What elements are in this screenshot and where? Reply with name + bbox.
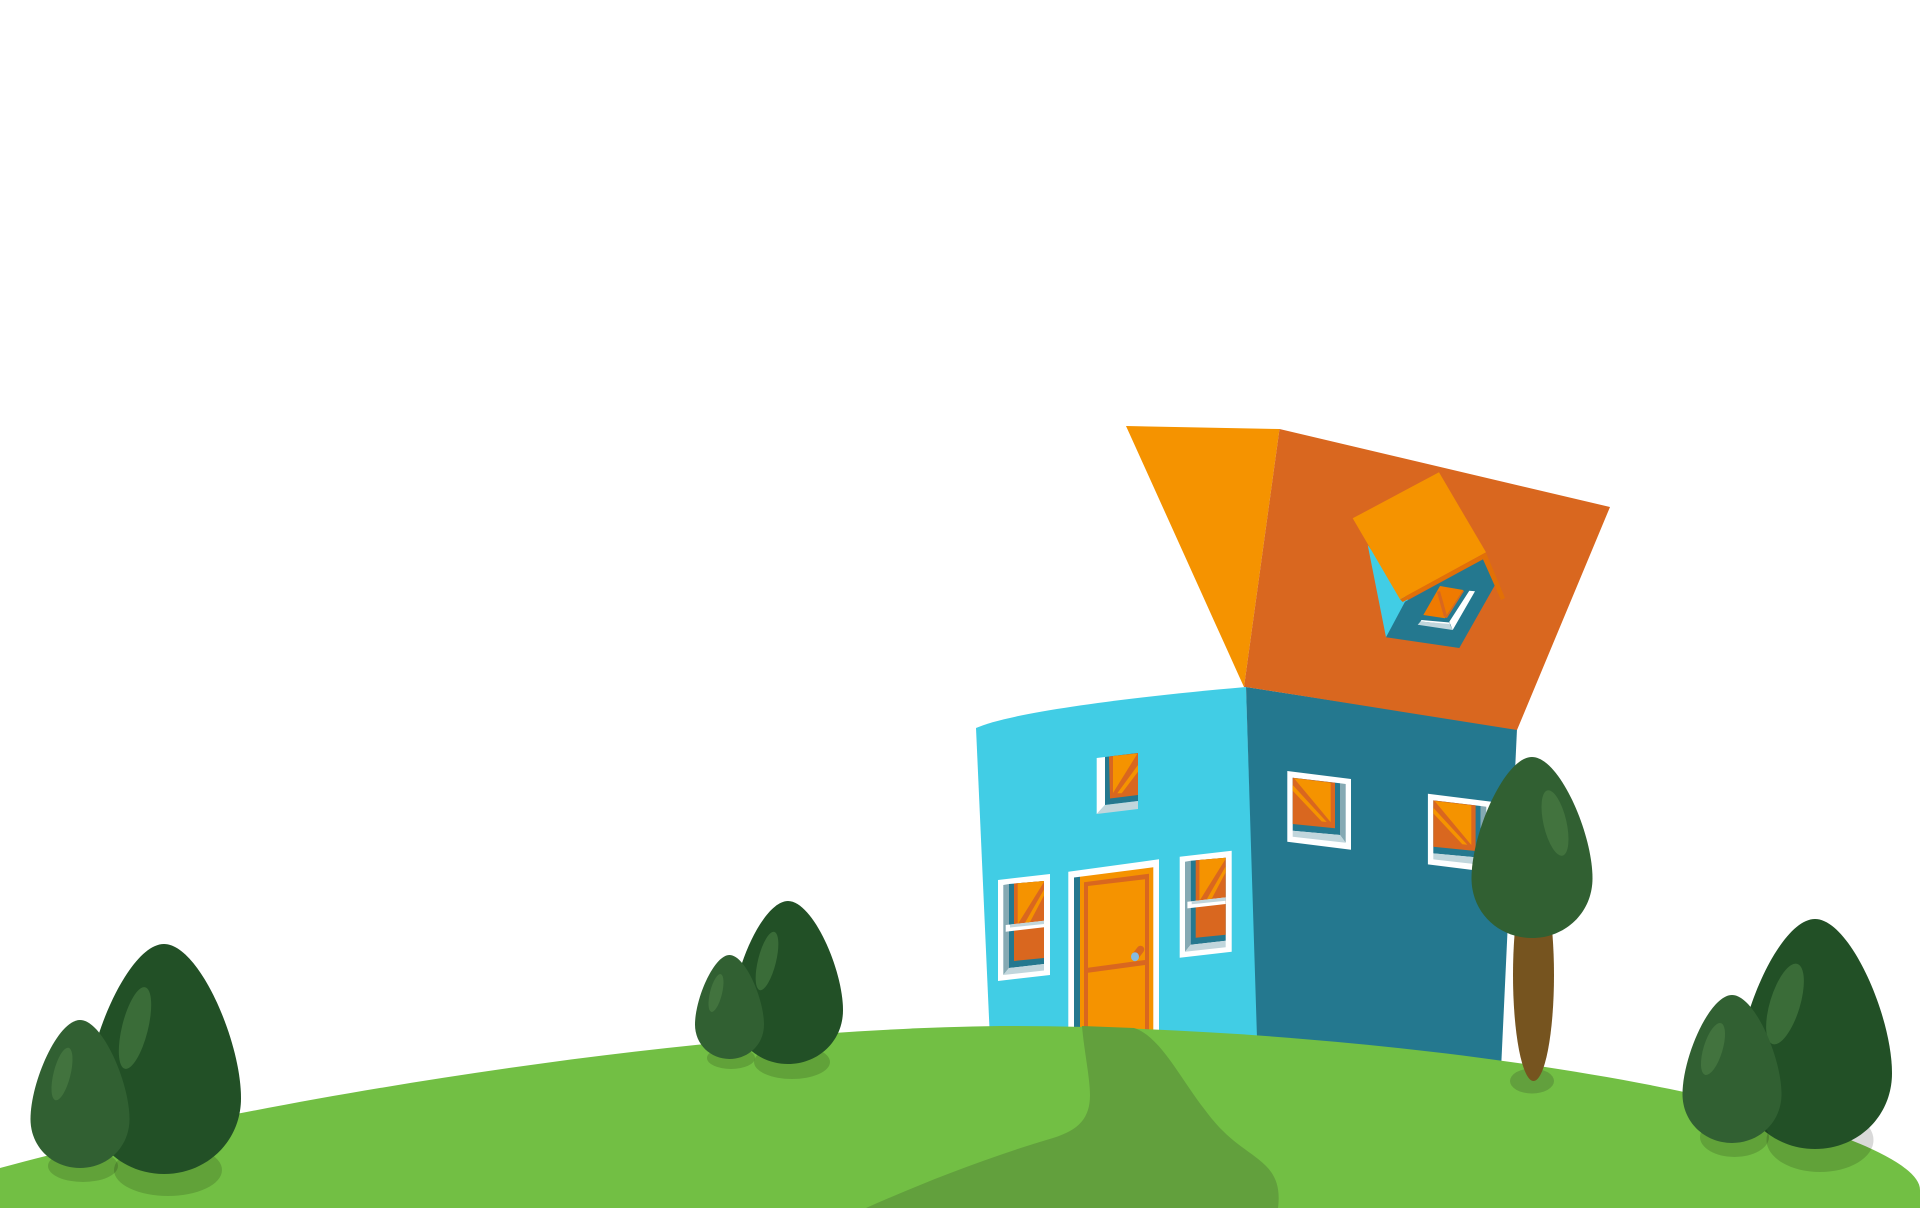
window: right of door [1180, 851, 1232, 958]
door [1068, 859, 1159, 1040]
dormer side [1368, 545, 1408, 637]
highlight [705, 973, 727, 1013]
highlight [1536, 788, 1574, 858]
highlight [47, 1046, 77, 1102]
tree: middle small bush [695, 955, 764, 1069]
foliage [1682, 995, 1782, 1143]
trunk [1513, 869, 1554, 1081]
dirt path [866, 1026, 1279, 1208]
roof gable [1126, 426, 1280, 687]
door knob [1131, 950, 1140, 961]
highlight [112, 984, 158, 1072]
shadow [48, 1150, 118, 1182]
window: upper left wall [1097, 753, 1138, 814]
shadow [1510, 1068, 1554, 1094]
dormer roof edge [1400, 553, 1505, 602]
highlight [751, 930, 783, 992]
tree: right big bush [1738, 919, 1892, 1172]
dormer window [1418, 586, 1475, 630]
dormer roof [1353, 472, 1486, 599]
shadow [1766, 1108, 1874, 1172]
shadow [754, 1045, 830, 1079]
tree: middle big bush [733, 901, 843, 1079]
left wall [976, 687, 1258, 1040]
dormer front [1386, 559, 1495, 648]
foliage [87, 944, 241, 1174]
foliage [1738, 919, 1892, 1149]
highlight [1758, 959, 1812, 1049]
house [976, 426, 1610, 1070]
foliage [30, 1020, 130, 1168]
tree: right small bush [1682, 995, 1782, 1157]
shadow [707, 1047, 755, 1069]
dormer [1353, 472, 1505, 648]
window: right wall first [1287, 771, 1351, 850]
hill [0, 1026, 1920, 1208]
tree: tall tree by house [1472, 757, 1592, 1094]
tree: left small bush [30, 1020, 130, 1182]
roof slope [1244, 429, 1610, 730]
shadow [114, 1144, 222, 1196]
right wall [1246, 687, 1517, 1070]
foliage [733, 901, 843, 1064]
window: lower left wall [998, 874, 1050, 981]
tree: left big bush [87, 944, 241, 1196]
shadow [1700, 1117, 1769, 1157]
highlight [1696, 1020, 1730, 1078]
window: right wall second [1428, 794, 1492, 872]
foliage [695, 955, 764, 1059]
foliage [1472, 757, 1592, 938]
